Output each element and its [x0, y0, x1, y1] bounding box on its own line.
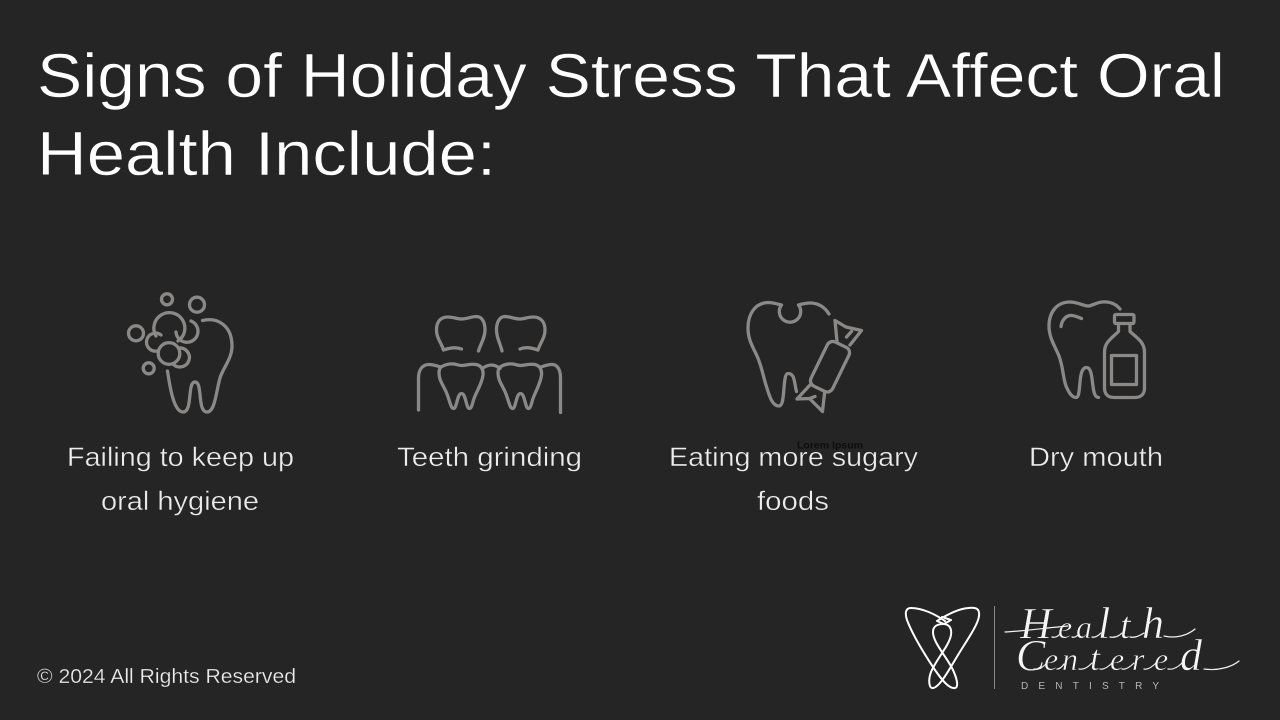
logo wordmark: H	[1019, 599, 1054, 648]
label: eating more sugary foods	[669, 442, 919, 516]
logo wordmark: C	[1016, 631, 1046, 680]
logo wordmark: DENTISTRY	[1021, 681, 1159, 692]
label: failing to keep up oral hygiene	[67, 442, 294, 516]
logo wordmark: h	[1142, 599, 1164, 648]
icon: teeth grinding	[418, 316, 560, 412]
logo wordmark: t	[1120, 605, 1132, 647]
icon: tooth with bottle	[1049, 302, 1144, 398]
icon: tooth with candy	[748, 302, 862, 412]
logo wordmark: l	[1098, 599, 1110, 648]
icon: tooth with bubbles	[128, 294, 232, 412]
logo wordmark: n	[1062, 641, 1078, 677]
logo wordmark: a	[1076, 609, 1092, 645]
logo wordmark: t	[1090, 638, 1101, 678]
logo divider	[994, 606, 996, 689]
title: Health Include:	[37, 120, 496, 189]
logo wordmark: d	[1180, 631, 1203, 680]
stray caption: Lorem Ipsum	[797, 440, 863, 452]
logo wordmark: e	[1110, 641, 1124, 677]
title	[37, 42, 1225, 189]
title: Signs of Holiday Stress That Affect Oral	[37, 42, 1225, 111]
label: failing to keep up oral hygiene: oral hygiene	[101, 486, 259, 516]
label: dry mouth: Dry mouth	[1029, 442, 1163, 472]
label: failing to keep up oral hygiene: Failing to keep up	[67, 442, 294, 472]
logo wordmark: e	[1154, 641, 1168, 677]
label: eating more sugary foods: Eating more sugary	[669, 442, 919, 472]
label: eating more sugary foods: foods	[757, 486, 829, 516]
logo wordmark	[1005, 599, 1239, 692]
logo wordmark: e	[1058, 609, 1072, 645]
logo wordmark: e	[1044, 641, 1058, 677]
logo wordmark: r	[1132, 641, 1145, 677]
copyright: © 2024 All Rights Reserved	[37, 666, 296, 688]
logo	[906, 599, 1239, 692]
label: teeth grinding: Teeth grinding	[397, 442, 582, 472]
logo mark	[906, 608, 979, 688]
